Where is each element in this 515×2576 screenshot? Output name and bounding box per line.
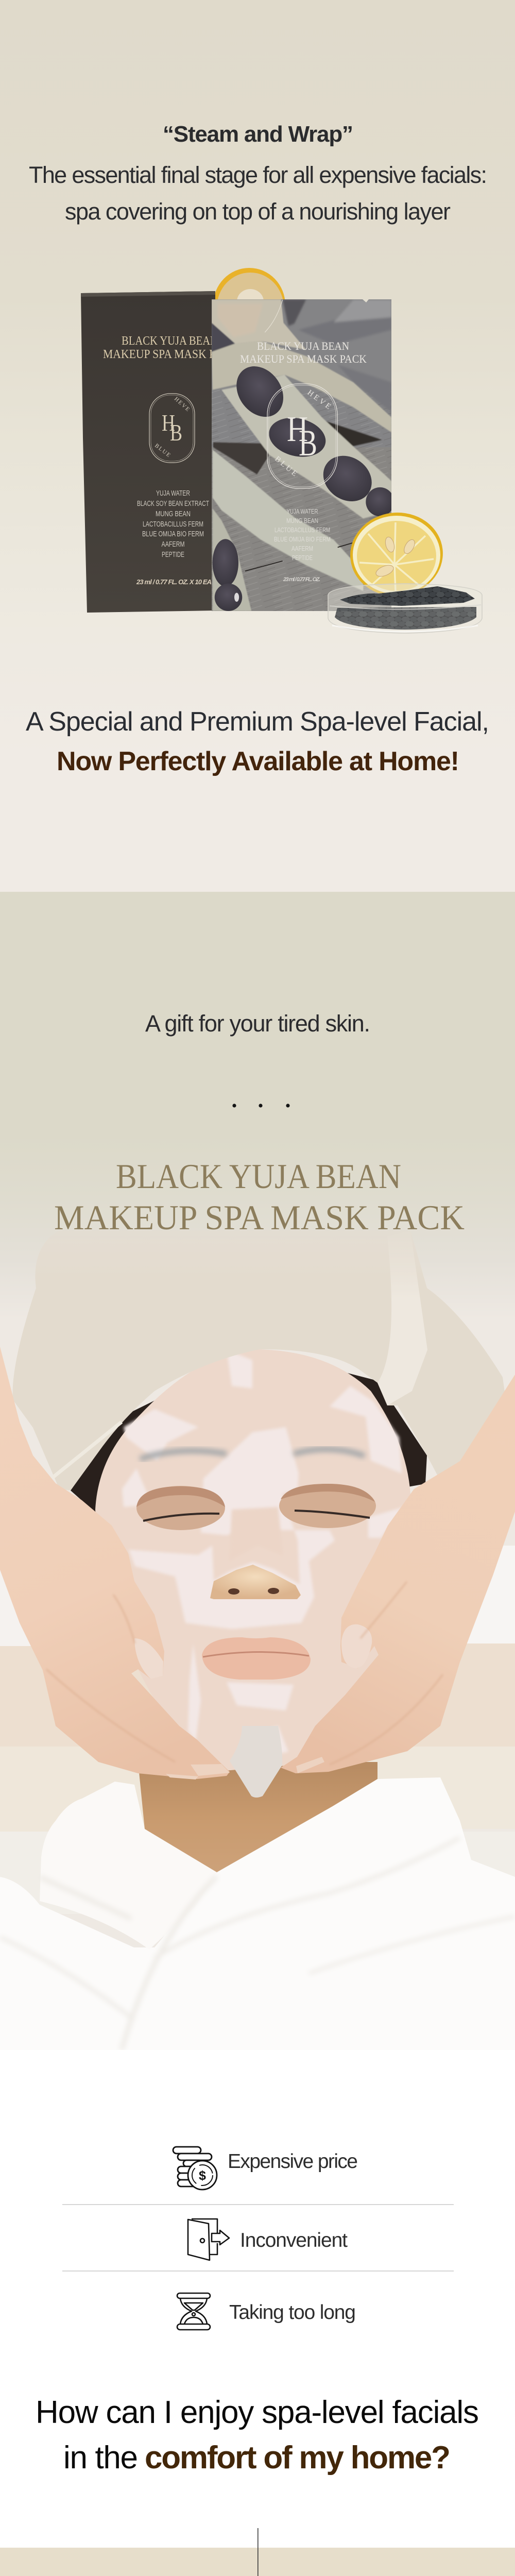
eye openings xyxy=(136,1484,376,1530)
question headline: in the xyxy=(63,2440,138,2476)
box ingredient list: LACTOBACILLUS FERM xyxy=(143,520,203,529)
question headline: comfort of my home? xyxy=(145,2440,451,2476)
box logo: BLUE xyxy=(153,443,172,459)
hero closing headline xyxy=(26,707,489,776)
box ingredient list: AAFERM xyxy=(162,540,184,549)
towel wrap xyxy=(13,1230,506,1490)
panel: gift section with spa photo xyxy=(0,892,515,2050)
pouch ingredient list: PEPTIDE xyxy=(292,554,313,562)
pouch ingredient list: YUJA WATER xyxy=(286,507,318,515)
product title: MAKEUP SPA MASK PACK xyxy=(54,1198,465,1237)
pouch title: MAKEUP SPA MASK PACK xyxy=(240,352,367,365)
neck xyxy=(138,1762,377,1875)
label: expensive price: Expensive price xyxy=(228,2150,358,2173)
pouch logo xyxy=(267,384,337,488)
mouth opening xyxy=(202,1637,311,1680)
face with sheet mask xyxy=(95,1349,410,1772)
product title xyxy=(54,1157,465,1237)
icon: coins xyxy=(173,2147,217,2190)
hero closing headline: Now Perfectly Available at Home! xyxy=(57,747,459,776)
pouch title: BLACK YUJA BEAN xyxy=(257,340,349,352)
box logo: HEVE xyxy=(173,396,192,413)
pouch ingredient list: BLUE OMIJA BIO FERM xyxy=(274,535,331,543)
pouch ingredient list: 23 ml / 0.77 FL. OZ. xyxy=(283,577,320,583)
label: inconvenient: Inconvenient xyxy=(240,2229,348,2251)
pouch ingredient list xyxy=(274,507,331,583)
box ingredient list: BLUE OMIJA BIO FERM xyxy=(142,530,204,538)
panel: research and product xyxy=(0,2548,515,2576)
icon: hourglass xyxy=(177,2293,210,2330)
hair xyxy=(71,1350,427,1515)
panel: pain points xyxy=(0,2050,515,2548)
pouch title xyxy=(240,340,367,365)
photo: woman with sheet mask xyxy=(0,1230,515,2050)
icon: yuja slice xyxy=(346,508,447,601)
photo backdrop cushion xyxy=(0,1546,515,1914)
pouch ingredient list: AAFERM xyxy=(291,545,313,552)
question headline xyxy=(36,2395,479,2476)
box ingredient list: BLACK SOY BEAN EXTRACT xyxy=(137,500,209,508)
icon: coins: $ xyxy=(199,2168,206,2183)
box volume: 23 ml / 0.77 FL. OZ. X 10 EA xyxy=(136,578,212,586)
intro text block: The essential final stage for all expensive facials: xyxy=(29,162,487,188)
pouch logo: BLUE xyxy=(273,455,300,480)
pouch logo: HEVE xyxy=(306,388,334,412)
pouch ingredient list: LACTOBACILLUS FERM xyxy=(274,526,330,534)
box ingredient list: PEPTIDE xyxy=(162,551,184,559)
pouch logo: H xyxy=(287,410,308,449)
hand: right xyxy=(281,1375,515,1773)
box logo: H xyxy=(162,410,175,436)
box ingredient list xyxy=(137,489,209,559)
hand: left xyxy=(0,1347,230,1780)
intro heading: Steam and Wrap: “Steam and Wrap” xyxy=(163,122,353,147)
box logo xyxy=(149,394,195,463)
icon: glass dish of black beans xyxy=(328,584,482,633)
intro text block: spa covering on top of a nourishing layer xyxy=(65,198,451,225)
product title: BLACK YUJA BEAN xyxy=(116,1157,401,1196)
label: taking too long: Taking too long xyxy=(229,2301,356,2324)
panel: hero with product xyxy=(0,0,515,892)
box title xyxy=(103,334,238,361)
box title: MAKEUP SPA MASK PACK xyxy=(103,348,238,361)
box logo: B xyxy=(170,419,182,446)
product pouch xyxy=(212,299,394,611)
product box xyxy=(81,291,238,613)
pouch ingredient list: MUNG BEAN xyxy=(286,517,318,524)
question headline: How can I enjoy spa-level facials xyxy=(36,2395,479,2430)
three dots xyxy=(232,1104,290,1108)
box title: BLACK YUJA BEAN xyxy=(122,334,218,348)
intro text block xyxy=(29,162,487,225)
nose opening xyxy=(210,1565,301,1599)
hero closing headline: A Special and Premium Spa-level Facial, xyxy=(26,707,489,737)
white bathrobe xyxy=(0,1777,515,2050)
mask chin tip xyxy=(230,1726,282,1798)
icon: dried yuja slice behind the pouch xyxy=(213,268,285,343)
icon: door with arrow xyxy=(188,2219,229,2260)
vertical connector line xyxy=(258,2528,259,2576)
pouch logo: B xyxy=(299,422,317,464)
gift tagline: A gift for your tired skin. xyxy=(145,1010,370,1037)
box ingredient list: YUJA WATER xyxy=(156,489,190,498)
box ingredient list: MUNG BEAN xyxy=(156,510,191,518)
